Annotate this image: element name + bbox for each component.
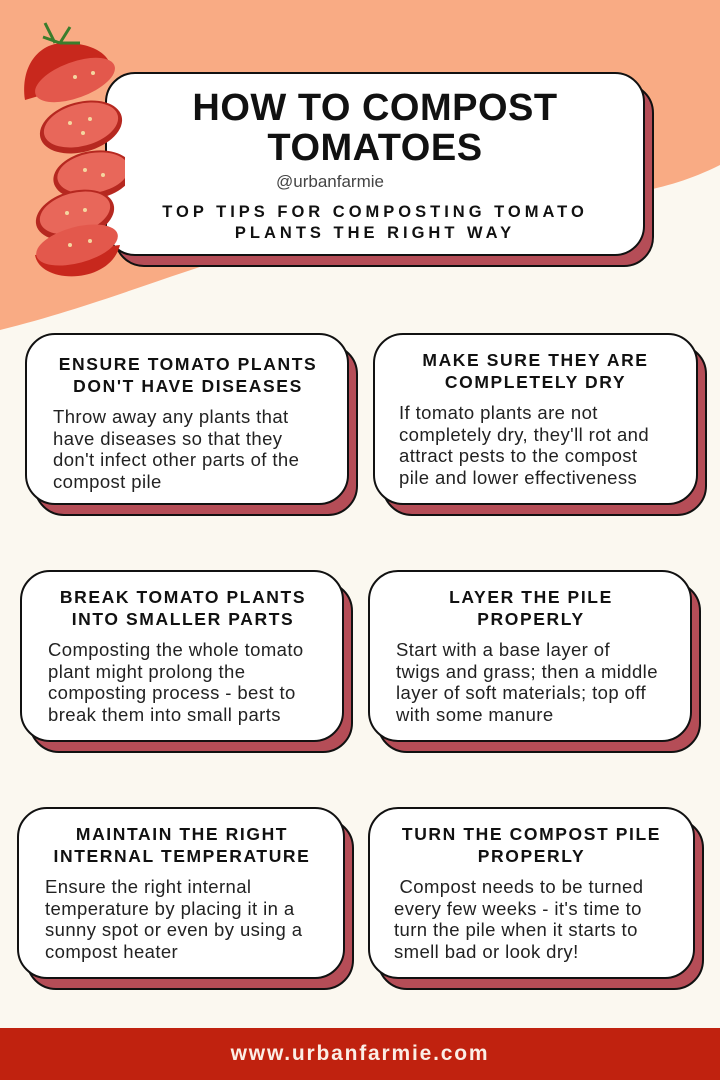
panel: turn: Compost needs to be turned: [400, 876, 643, 897]
panel: diseases: [25, 333, 358, 516]
panel: dry: If tomato plants are not: [399, 402, 598, 423]
subtitle: PLANTS THE RIGHT WAY: [235, 224, 515, 242]
panel: smaller parts: composting process - best to: [48, 682, 296, 703]
panel: turn: every few weeks - it's time to: [394, 898, 642, 918]
panel: dry: [373, 333, 707, 516]
panel: temperature: MAINTAIN THE RIGHT: [76, 824, 288, 844]
footer: [0, 1028, 720, 1080]
footer: www.urbanfarmie.com: [231, 1042, 489, 1065]
panel: diseases: ENSURE TOMATO PLANTS: [59, 354, 317, 374]
panel: layer: LAYER THE PILE: [449, 587, 613, 607]
panel: smaller parts: INTO SMALLER PARTS: [72, 609, 294, 629]
panel: dry: pile and lower effectiveness: [399, 466, 637, 488]
panel: smaller parts: break them into small parts: [48, 704, 281, 724]
subtitle: [162, 203, 588, 242]
panel: smaller parts: Composting the whole tomato: [48, 639, 304, 660]
panel: layer: layer of soft materials; top off: [396, 682, 646, 703]
title: TOMATOES: [267, 127, 483, 169]
subtitle: TOP TIPS FOR COMPOSTING TOMATO: [162, 203, 588, 221]
panel: smaller parts: BREAK TOMATO PLANTS: [60, 587, 306, 607]
panel: turn: [368, 807, 704, 990]
panel: temperature: temperature by placing it in a: [45, 898, 295, 918]
panel: diseases: Throw away any plants that: [53, 406, 289, 427]
panel: smaller parts: plant might prolong the: [48, 660, 245, 682]
panel: temperature: sunny spot or even by using a: [45, 919, 302, 940]
panel: turn: smell bad or look dry!: [394, 940, 579, 962]
panel: temperature: INTERNAL TEMPERATURE: [54, 846, 310, 866]
panel: diseases: DON'T HAVE DISEASES: [73, 376, 303, 396]
panel: diseases: don't infect other parts of the: [53, 449, 299, 470]
panel: temperature: [17, 807, 354, 990]
panel: dry: attract pests to the compost: [399, 445, 637, 466]
panel: dry: MAKE SURE THEY ARE: [422, 350, 649, 370]
panel: turn: PROPERLY: [478, 846, 585, 866]
panel: smaller parts: [20, 570, 353, 753]
title: [192, 87, 558, 169]
panel: dry: completely dry, they'll rot and: [399, 424, 649, 444]
panel: dry: COMPLETELY DRY: [445, 372, 626, 392]
panel: layer: [368, 570, 701, 753]
panel: diseases: have diseases so that they: [53, 428, 282, 448]
title: HOW TO COMPOST: [192, 87, 558, 129]
panel: layer: with some manure: [396, 704, 554, 724]
panel: turn: TURN THE COMPOST PILE: [402, 824, 661, 844]
panel: layer: twigs and grass; then a middle: [396, 660, 658, 682]
panel: layer: PROPERLY: [477, 609, 585, 629]
panel: temperature: compost heater: [45, 940, 178, 962]
peach background wave: [0, 0, 720, 330]
panel: diseases: compost pile: [53, 470, 162, 492]
icon: sliced tomato: [24, 22, 125, 276]
panel: turn: turn the pile when it starts to: [394, 919, 638, 940]
panel: temperature: Ensure the right internal: [45, 876, 251, 897]
header card: [105, 72, 654, 267]
handle: @urbanfarmie: [276, 172, 384, 191]
panel: layer: Start with a base layer of: [396, 639, 610, 660]
